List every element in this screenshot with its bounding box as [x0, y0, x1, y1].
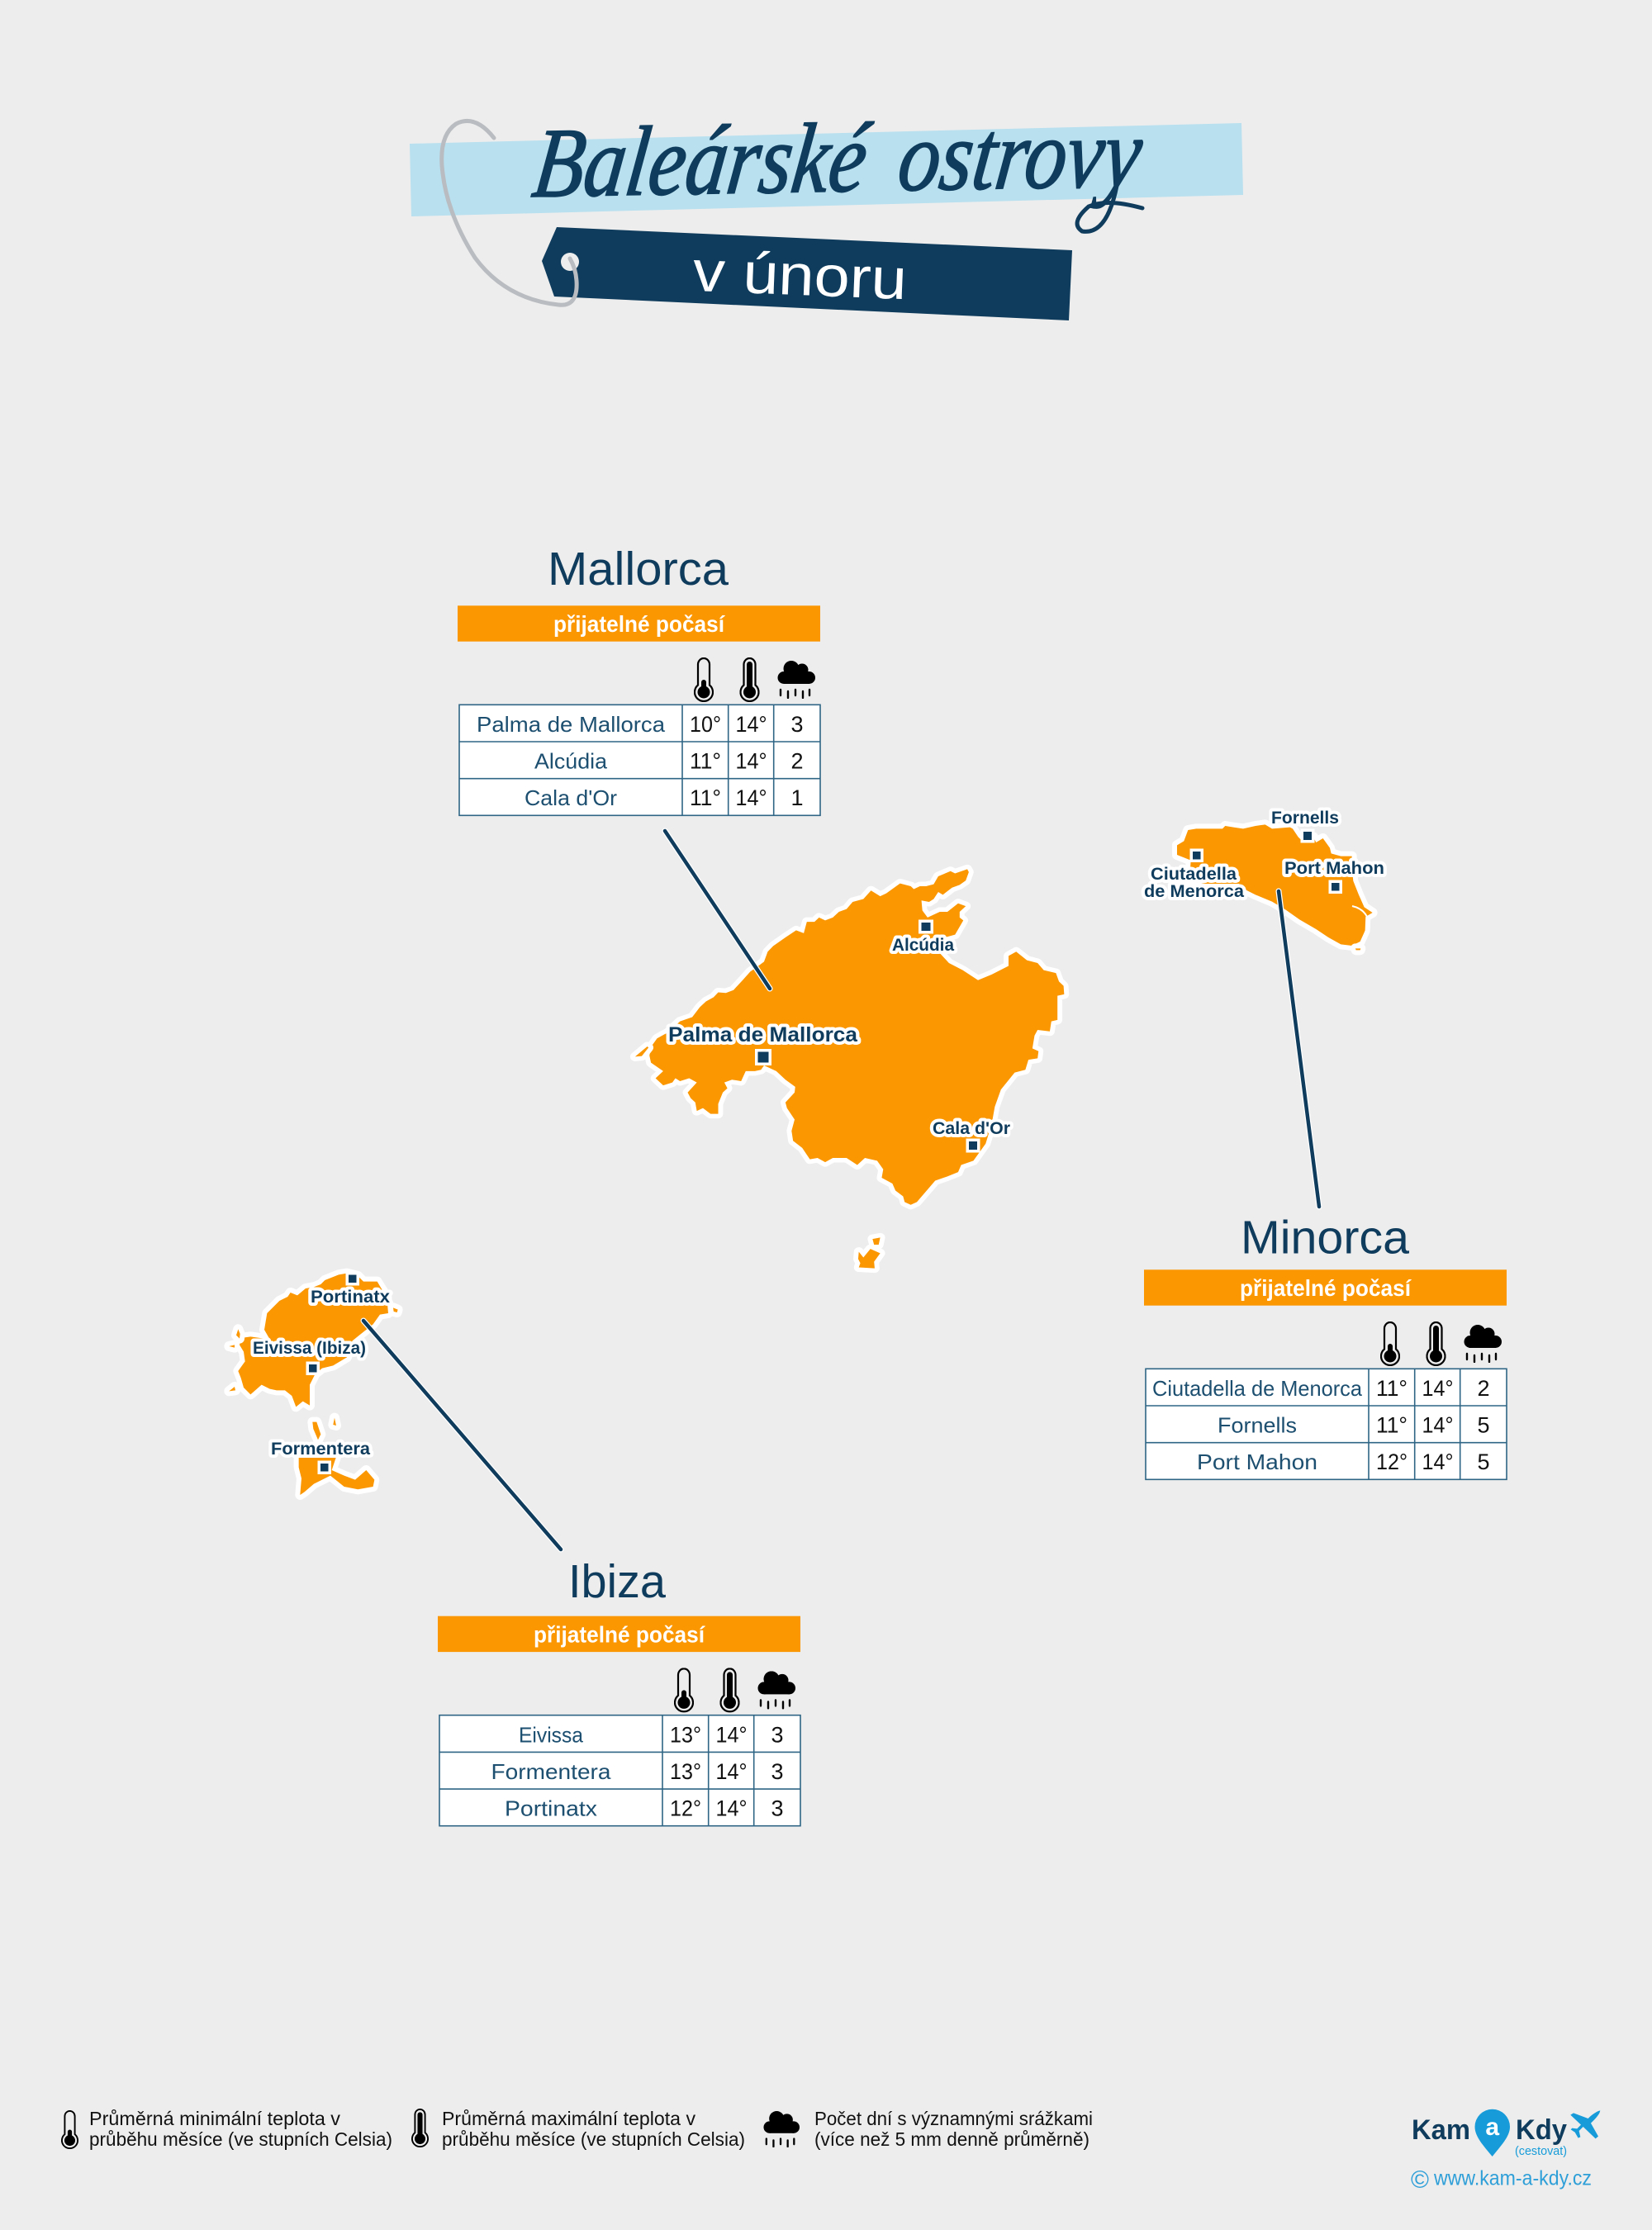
- legend text: rainy days: (více než 5 mm denně průměrně): [814, 2128, 1089, 2150]
- weather table: Mallorca: [459, 705, 820, 815]
- rating bar: [458, 605, 820, 642]
- city label: Palma de Mallorca: Palma de Mallorca: [668, 1023, 858, 1046]
- logo pin: [1475, 2109, 1510, 2156]
- weather table: Minorca: 2: [1477, 1376, 1490, 1401]
- icon: maximum temperature: [720, 1668, 738, 1711]
- weather table: Mallorca: Alcúdia: [534, 748, 608, 773]
- city marker: Alcúdia: [922, 923, 930, 931]
- weather table: Ibiza: 3: [771, 1722, 784, 1747]
- icon: minimum temperature: [675, 1668, 693, 1711]
- city label: Alcúdia: Alcúdia: [892, 936, 954, 955]
- city label: Cala d'Or: Cala d'Or: [933, 1119, 1010, 1138]
- dark price tag: [542, 227, 1072, 320]
- legend text: maximum temperature: průběhu měsíce (ve stupních Celsia): [442, 2128, 745, 2150]
- light blue ribbon: [410, 123, 1243, 216]
- island shapes: Ibiza and Formentera: [229, 1274, 398, 1495]
- icon: minimum temperature: [695, 658, 713, 701]
- weather table: Mallorca: 14°: [735, 748, 767, 773]
- logo word: Kam: Kam: [1412, 2114, 1470, 2146]
- weather table: Minorca: 12°: [1376, 1450, 1408, 1474]
- weather table: Mallorca: 3: [790, 712, 804, 737]
- icon: rainy days: [1464, 1325, 1502, 1362]
- tag hole: [561, 253, 579, 271]
- weather table: Mallorca: Cala d'Or: [525, 785, 617, 810]
- weather table: Ibiza: 14°: [715, 1759, 747, 1784]
- rating bar: přijatelné počasí: [553, 611, 725, 637]
- icon: rainy days: [778, 661, 815, 698]
- weather table: Ibiza: 14°: [715, 1722, 747, 1747]
- logo: Kam a Kdy: [1411, 2109, 1600, 2194]
- map: Minorca: [1144, 809, 1384, 1207]
- leader line: Minorca: [1279, 891, 1319, 1207]
- weather table: Ibiza: Eivissa: [519, 1722, 584, 1747]
- website: www.kam-a-kdy.cz: [1433, 2167, 1592, 2190]
- city marker: Palma de Mallorca: [758, 1052, 768, 1062]
- map: Mallorca: [635, 831, 1064, 1269]
- city marker: Fornells: [1303, 832, 1312, 840]
- weather table: Minorca: 14°: [1422, 1450, 1454, 1474]
- city marker: Ciutadella de Menorca: [1193, 852, 1201, 859]
- weather table: Ibiza: Portinatx: [505, 1796, 597, 1820]
- weather table: Ibiza: 3: [771, 1759, 784, 1784]
- weather table: Ibiza: 12°: [670, 1796, 701, 1820]
- weather table: Minorca: 11°: [1376, 1412, 1408, 1437]
- city marker: Cala d'Or: [969, 1141, 977, 1150]
- weather table: Ibiza: [439, 1715, 800, 1826]
- logo tagline: (cestovat): [1515, 2144, 1567, 2158]
- weather table: Mallorca: 11°: [690, 785, 721, 810]
- weather table: Minorca: 5: [1477, 1450, 1490, 1474]
- city marker: Formentera: [320, 1464, 329, 1472]
- city label: Eivissa (Ibiza): Eivissa (Ibiza): [253, 1339, 366, 1358]
- logo word: Kdy: Kdy: [1516, 2114, 1567, 2146]
- rating bar: [438, 1616, 800, 1652]
- weather table: Mallorca: 1: [790, 785, 804, 810]
- legend icon: maximum temperature: [412, 2109, 428, 2147]
- city label: Ciutadella: Ciutadella: [1151, 865, 1237, 884]
- weather table: Mallorca: 2: [790, 748, 804, 773]
- weather table: Ibiza: 13°: [670, 1722, 701, 1747]
- city marker: Portinatx: [349, 1275, 357, 1283]
- heading: Mallorca: Mallorca: [548, 543, 729, 595]
- weather table: Ibiza: 13°: [670, 1759, 701, 1784]
- weather table: Mallorca: 14°: [735, 785, 767, 810]
- weather table: Minorca: [1146, 1369, 1507, 1479]
- weather table: Mallorca: 10°: [690, 712, 721, 737]
- copyright symbol: ©: [1411, 2166, 1429, 2194]
- title banner: [410, 97, 1243, 320]
- island shapes: Minorca: [1177, 824, 1373, 950]
- city label: de Menorca: de Menorca: [1144, 882, 1244, 901]
- rating bar: [1144, 1269, 1507, 1306]
- weather table: Ibiza: 14°: [715, 1796, 747, 1820]
- logo letter a: a: [1485, 2114, 1499, 2141]
- heading: Ibiza: Ibiza: [568, 1555, 666, 1608]
- leader line core: Minorca: [1279, 891, 1319, 1207]
- legend text: minimum temperature: průběhu měsíce (ve stupních Celsia): [89, 2128, 392, 2150]
- weather table: Ibiza: 3: [771, 1796, 784, 1820]
- icon: rainy days: [758, 1671, 795, 1708]
- legend text: minimum temperature: Průměrná minimální teplota v: [89, 2108, 341, 2129]
- rating bar: přijatelné počasí: [534, 1621, 705, 1647]
- weather table: Minorca: Ciutadella de Menorca: [1152, 1376, 1363, 1401]
- legend: [62, 2108, 1093, 2150]
- heading: Minorca: Minorca: [1241, 1211, 1409, 1264]
- panel: Mallorca: [458, 543, 820, 815]
- legend text: maximum temperature: Průměrná maximální teplota v: [442, 2108, 696, 2129]
- weather table: Minorca: 14°: [1422, 1412, 1454, 1437]
- city label: Port Mahon: Port Mahon: [1284, 859, 1384, 878]
- city marker: Eivissa: [309, 1364, 317, 1373]
- harbour inlet: Port Mahon: [1352, 906, 1367, 917]
- leader line core: Ibiza: [363, 1321, 561, 1549]
- leader line: Mallorca: [665, 831, 770, 989]
- weather table: Minorca: Fornells: [1218, 1412, 1297, 1437]
- legend icon: minimum temperature: [62, 2111, 78, 2148]
- leader line: Ibiza: [363, 1321, 561, 1549]
- icon: maximum temperature: [740, 658, 758, 701]
- island shapes: Mallorca: [635, 869, 1064, 1269]
- rating bar: přijatelné počasí: [1240, 1275, 1412, 1301]
- weather table: Ibiza: Formentera: [491, 1759, 611, 1784]
- legend icon: rainy days: [763, 2111, 800, 2147]
- weather table: Minorca: 11°: [1376, 1376, 1408, 1401]
- title flourish: [1077, 186, 1142, 231]
- leader line core: Mallorca: [665, 831, 770, 989]
- city label: Fornells: Fornells: [1271, 809, 1339, 828]
- weather table: Minorca: Port Mahon: [1197, 1450, 1317, 1474]
- panel: Ibiza: [438, 1555, 800, 1826]
- weather table: Minorca: 5: [1477, 1412, 1490, 1437]
- weather table: Mallorca: 14°: [735, 712, 767, 737]
- icon: maximum temperature: [1427, 1322, 1446, 1365]
- city label: Portinatx: Portinatx: [311, 1288, 390, 1307]
- city marker: Port Mahon: [1332, 883, 1340, 890]
- panel: Minorca: [1144, 1211, 1507, 1479]
- legend text: rainy days: Počet dní s významnými srážkami: [814, 2108, 1093, 2129]
- icon: minimum temperature: [1381, 1322, 1399, 1365]
- map: Ibiza and Formentera: [229, 1274, 561, 1549]
- main title: Baleárské ostrovy: [528, 97, 1148, 218]
- icon: airplane: [1570, 2110, 1600, 2138]
- weather table: Mallorca: 11°: [690, 748, 721, 773]
- weather table: Mallorca: Palma de Mallorca: [477, 712, 666, 737]
- weather table: Minorca: 14°: [1422, 1376, 1454, 1401]
- subtitle: v únoru: [692, 239, 908, 311]
- city label: Formentera: Formentera: [271, 1440, 370, 1459]
- tag string: [442, 121, 577, 305]
